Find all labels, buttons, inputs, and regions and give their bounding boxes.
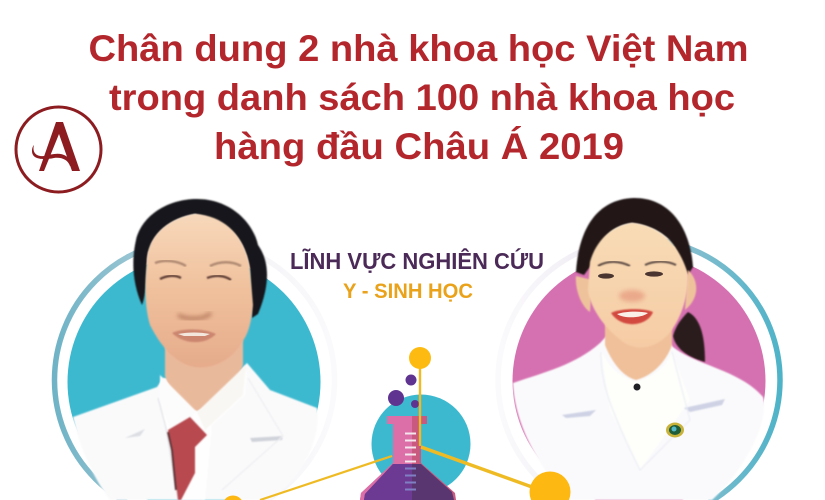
neck xyxy=(165,340,243,411)
field heading: LĨNH VỰC NGHIÊN CỨU xyxy=(290,247,544,274)
ponytail xyxy=(673,312,705,362)
face xyxy=(588,223,688,348)
hair xyxy=(133,199,267,318)
title: trong danh sách 100 nhà khoa học xyxy=(109,77,735,118)
network line left xyxy=(260,456,392,500)
eyes xyxy=(598,273,614,279)
portrait: female scientist xyxy=(498,198,780,500)
flask backdrop circle xyxy=(372,394,470,494)
nose xyxy=(619,290,645,302)
tie xyxy=(168,417,207,500)
mouth xyxy=(611,309,653,324)
title: hàng đầu Châu Á 2019 xyxy=(214,126,624,167)
badge xyxy=(666,422,684,438)
field heading: Y - SINH HỌC xyxy=(343,280,473,303)
node left xyxy=(222,496,244,500)
network line top xyxy=(419,358,421,446)
node top xyxy=(409,347,431,369)
eyebrows xyxy=(598,262,676,266)
flask illustration with network xyxy=(222,347,570,500)
eyebrows xyxy=(155,261,241,266)
bubbles xyxy=(388,374,419,408)
eyes xyxy=(160,276,231,280)
logo: letter A in circle xyxy=(16,107,101,192)
coat button xyxy=(634,384,640,390)
face xyxy=(145,214,253,367)
lab coat xyxy=(73,363,318,500)
hair xyxy=(576,198,693,275)
field heading xyxy=(290,247,544,303)
network line right xyxy=(421,447,532,487)
shirt and lapels xyxy=(562,350,725,470)
node right xyxy=(530,472,570,500)
nose xyxy=(178,313,211,319)
portrait: male scientist xyxy=(54,199,334,500)
title: Chân dung 2 nhà khoa học Việt Nam xyxy=(88,28,748,69)
coat lapels and shirt xyxy=(125,370,283,500)
mouth xyxy=(172,329,216,342)
neck xyxy=(605,320,672,380)
lab coat xyxy=(513,330,764,500)
flask xyxy=(360,416,456,500)
title xyxy=(88,28,748,167)
ears xyxy=(576,270,696,312)
shirt collar xyxy=(160,375,197,428)
